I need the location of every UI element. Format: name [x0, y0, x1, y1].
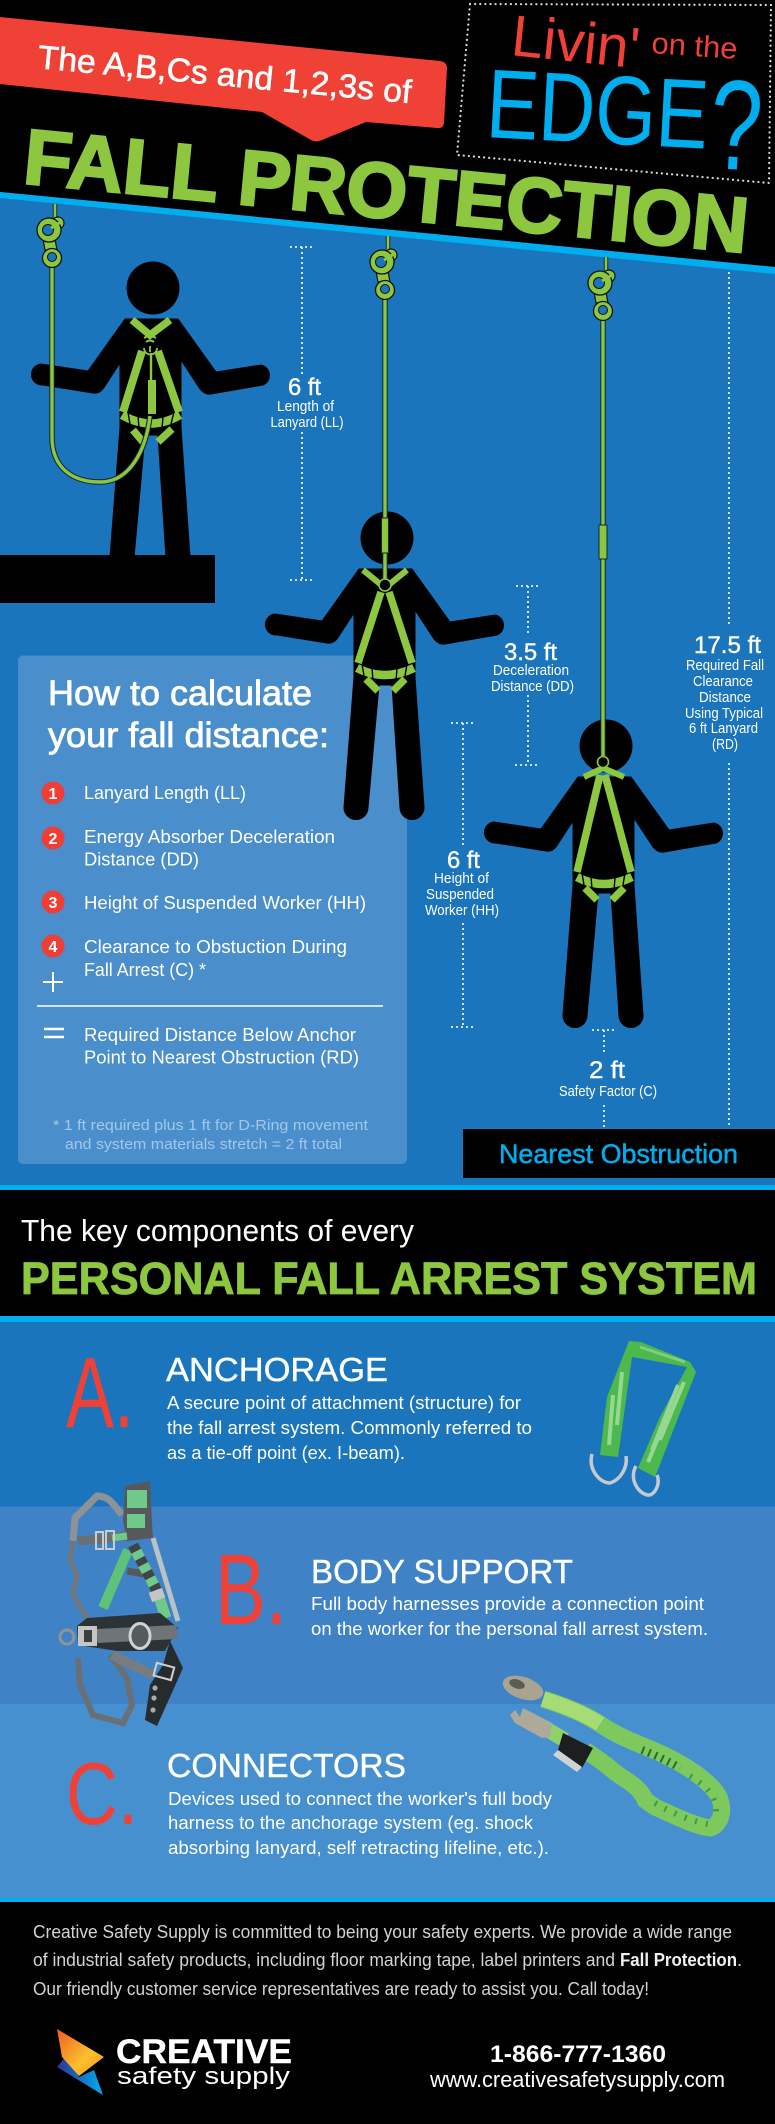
red title banner	[0, 17, 447, 142]
harness 2	[357, 570, 414, 691]
contact details: www.creativesafetysupply.com	[429, 2067, 725, 2092]
result text	[84, 1025, 359, 1068]
logo: Creative Safety Supply	[57, 2029, 292, 2095]
lanyard 3	[588, 257, 615, 768]
connectors heading: CONNECTORS	[167, 1747, 406, 1784]
result text: Required Distance Below Anchor	[84, 1025, 356, 1045]
step 2: Energy Absorber Deceleration	[84, 827, 335, 847]
letter B: B.	[215, 1534, 287, 1646]
footnote	[53, 1117, 369, 1153]
cyan divider	[0, 1316, 775, 1322]
section heading: key components: The key components of every	[21, 1213, 414, 1248]
chest strap	[78, 1536, 127, 1541]
dimension: 6 ft lanyard length: Lanyard (LL)	[270, 415, 344, 431]
connectors text	[168, 1788, 553, 1858]
dimension: 17.5 ft required clearance: Required Fall	[686, 658, 764, 674]
step 1: Lanyard Length (LL)	[84, 783, 246, 803]
contact details	[429, 2041, 725, 2092]
dimension: 6 ft worker height: 6 ft	[447, 847, 480, 874]
back pad	[123, 1481, 153, 1541]
handwritten Livin': Livin'	[509, 3, 643, 81]
body support text: on the worker for the personal fall arrest system.	[311, 1618, 708, 1639]
body support text: Full body harnesses provide a connection point	[311, 1593, 704, 1614]
hook 3	[588, 257, 615, 320]
panel: body support	[0, 1506, 775, 1704]
footer text: of industrial safety products, including floor marking tape, label printers and	[33, 1949, 615, 1970]
step 4	[42, 934, 347, 980]
dimension: 17.5 ft required clearance: Using Typical	[685, 706, 763, 722]
contact details: 1-866-777-1360	[490, 2041, 666, 2068]
footer text: Fall Protection	[620, 1949, 737, 1970]
illustration: anchor strap	[591, 1341, 696, 1495]
nearest obstruction block: Nearest Obstruction	[499, 1139, 738, 1169]
green straps	[103, 1550, 128, 1608]
logo: Creative Safety Supply: CREATIVE	[116, 2033, 292, 2071]
step 1	[42, 782, 246, 804]
dimension: 3.5 ft deceleration: Distance (DD)	[491, 679, 574, 695]
lanyard 1	[37, 204, 150, 482]
dimension: 17.5 ft required clearance: 17.5 ft	[694, 632, 761, 659]
dimension: 6 ft worker height: Height of	[434, 871, 490, 887]
nearest obstruction block	[463, 1129, 775, 1178]
footer text: Our friendly customer service representatives are ready to assist you. Call today!	[33, 1978, 649, 1999]
step 3: 3	[49, 895, 58, 912]
worker 2 at end of lanyard, in front of panel	[265, 512, 503, 820]
section heading: key components	[21, 1213, 757, 1304]
anchorage text	[167, 1392, 532, 1463]
plus sign	[43, 972, 63, 992]
panel: fall diagram blue background	[0, 192, 775, 1185]
anchorage text: the fall arrest system. Commonly referred to	[167, 1417, 532, 1438]
connectors text: Devices used to connect the worker's full body	[168, 1788, 553, 1809]
dimension: 6 ft worker height: Worker (HH)	[425, 903, 499, 919]
footnote: and system materials stretch = 2 ft total	[65, 1136, 342, 1153]
step 1: 1	[49, 786, 58, 803]
dimension: 17.5 ft required clearance: Distance	[699, 690, 751, 706]
harness 3	[577, 768, 632, 900]
hook 1	[37, 204, 64, 268]
step 2	[42, 826, 335, 870]
right leg strap	[145, 1641, 183, 1726]
footer text	[33, 1921, 742, 1999]
dimension: 3.5 ft deceleration	[491, 586, 574, 765]
panel: anchorage	[0, 1322, 775, 1507]
footer text: .	[737, 1949, 742, 1970]
equals sign	[44, 1029, 64, 1037]
dimension: 17.5 ft required clearance: Clearance	[693, 674, 753, 690]
harness 1	[122, 320, 180, 442]
step 3: Height of Suspended Worker (HH)	[84, 893, 366, 913]
footnote: * 1 ft required plus 1 ft for D-Ring movement	[53, 1117, 369, 1134]
panel: how to calculate	[18, 656, 407, 1164]
step 4: Clearance to Obstuction During	[84, 937, 347, 957]
dimension: 17.5 ft required clearance	[685, 272, 764, 1127]
title: Fall Protection: FALL PROTECTION	[20, 112, 752, 270]
anchorage text: as a tie-off point (ex. I-beam).	[167, 1442, 405, 1463]
waist belt	[77, 1613, 178, 1651]
dimension: 3.5 ft deceleration: Deceleration	[493, 663, 569, 679]
dimension: 2 ft safety factor: 2 ft	[589, 1057, 625, 1084]
section heading: personal fall arrest system: PERSONAL FALL ARREST SYSTEM	[21, 1253, 757, 1304]
dimension: 3.5 ft deceleration: 3.5 ft	[504, 639, 557, 666]
dimension: 6 ft lanyard length	[270, 247, 344, 580]
cyan diagonal band	[0, 192, 775, 274]
anchorage heading: ANCHORAGE	[166, 1351, 388, 1388]
cyan divider	[0, 1185, 775, 1190]
dimension: 6 ft lanyard length: 6 ft	[288, 374, 321, 401]
dimension: 6 ft worker height	[425, 723, 499, 1027]
panel: connectors	[0, 1704, 775, 1898]
step 4: 4	[49, 939, 58, 956]
dimension: 2 ft safety factor: Safety Factor (C)	[559, 1084, 657, 1100]
dimension: 17.5 ft required clearance: 6 ft Lanyard	[689, 721, 758, 737]
banner text: The A,B,Cs and 1,2,3s of	[36, 38, 414, 110]
lanyard 2	[370, 236, 397, 591]
letter C: C.	[66, 1744, 138, 1843]
heading: How to calculate	[48, 674, 312, 713]
step 2: Distance (DD)	[84, 850, 199, 870]
leg loops	[78, 1655, 132, 1723]
dimension: 6 ft worker height: Suspended	[426, 887, 494, 903]
cyan divider	[0, 1898, 775, 1902]
platform	[0, 555, 215, 603]
letter A: A.	[66, 1337, 134, 1449]
dimension: 6 ft lanyard length: Length of	[277, 399, 335, 415]
illustration: shock absorbing lanyard	[500, 1671, 722, 1828]
panel: how to calculate: your fall distance:	[48, 716, 329, 755]
anchorage text: A secure point of attachment (structure) for	[167, 1392, 521, 1413]
connectors text: harness to the anchorage system (eg. shock	[168, 1812, 534, 1833]
logo icon	[57, 2029, 104, 2095]
hook 2	[370, 236, 397, 300]
worker 1 standing on platform	[0, 262, 269, 603]
body support heading: BODY SUPPORT	[311, 1553, 573, 1590]
illustration: full body harness	[60, 1481, 183, 1726]
shoulder straps	[73, 1496, 122, 1541]
result text: Point to Nearest Obstruction (RD)	[84, 1048, 359, 1068]
dimension: 2 ft safety factor	[559, 1030, 657, 1127]
step 2: 2	[49, 831, 58, 848]
dimension: 17.5 ft required clearance: (RD)	[712, 737, 738, 753]
worker 3 at full fall distance	[484, 720, 722, 1028]
handwritten EDGE: EDGE	[484, 48, 711, 170]
connectors text: absorbing lanyard, self retracting lifeline, etc.).	[168, 1837, 549, 1858]
dotted callout: Livin' on the Edge	[457, 3, 771, 199]
logo: Creative Safety Supply: safety supply	[117, 2063, 290, 2090]
body support text	[311, 1593, 708, 1639]
handwritten on the: on the	[651, 27, 739, 66]
step 4: Fall Arrest (C) *	[84, 960, 206, 980]
footer text: Creative Safety Supply is committed to being your safety experts. We provide a wide range	[33, 1921, 732, 1942]
